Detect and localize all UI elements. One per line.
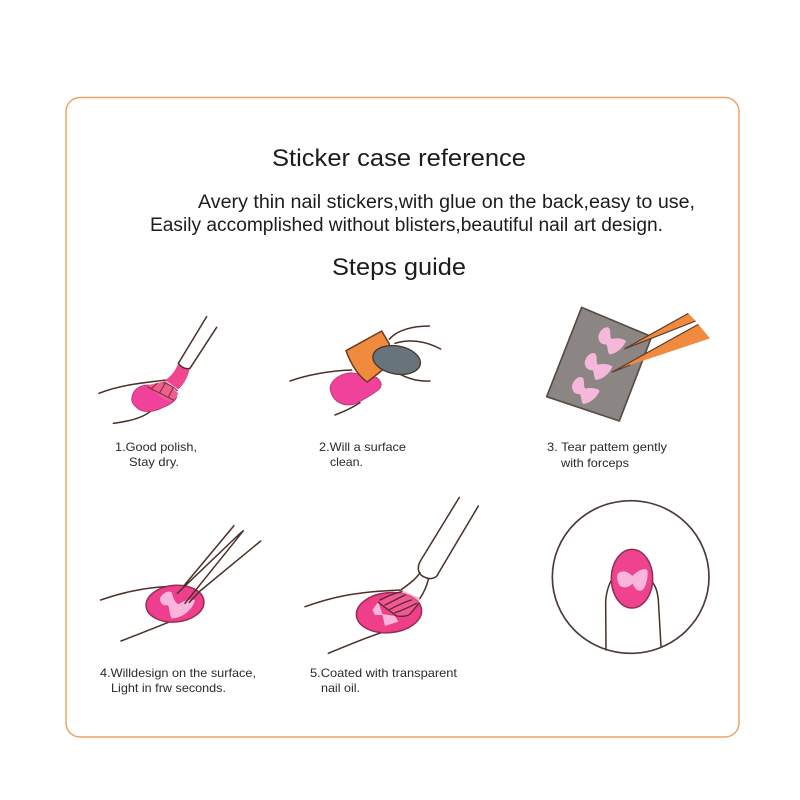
finger outline (606, 580, 661, 650)
result illustration: finished nail in circle (552, 501, 709, 653)
step 4 caption: 4.Willdesign on the surface, (100, 666, 256, 680)
grey swab (371, 342, 423, 378)
step 3 caption: with forceps (560, 456, 629, 470)
brush handle (178, 317, 217, 369)
intro text: Easily accomplished without blisters,beautiful nail art design. (150, 215, 663, 236)
step 5 illustration: transparent oil brush (305, 497, 478, 653)
step 2 caption: clean. (330, 455, 363, 469)
brush handle (402, 497, 478, 598)
forceps (624, 313, 696, 349)
step 4 caption: Light in frw seconds. (111, 681, 226, 695)
step 1 caption (115, 440, 197, 469)
step 1 caption: 1.Good polish, (115, 440, 197, 454)
orange pad (346, 331, 389, 382)
circle outline (552, 501, 709, 653)
bow sticker (372, 602, 398, 626)
bow sticker (617, 569, 648, 591)
title: Sticker case reference (272, 145, 526, 172)
step 4 illustration: placing bow with forceps (101, 526, 261, 641)
step 3 illustration: sticker sheet and forceps (547, 307, 710, 421)
nail (611, 549, 653, 608)
nail (145, 583, 205, 624)
panel: rounded card (66, 98, 739, 737)
intro text (150, 192, 695, 236)
bow sticker (160, 592, 195, 618)
step 5 caption: nail oil. (321, 681, 360, 695)
nail (132, 385, 177, 412)
brush bristles (148, 381, 178, 402)
step 3 caption (547, 440, 667, 470)
step 1 illustration: polish brush on nail (99, 317, 217, 423)
step 5 caption (310, 666, 458, 695)
step 5 caption: 5.Coated with transparent (310, 666, 458, 680)
step 2 illustration: cleaning pad on nail (290, 326, 441, 415)
heading: steps guide: Steps guide (332, 254, 466, 281)
brush bristles (378, 590, 420, 616)
step 3 caption: 3. Tear pattem gently (547, 440, 667, 454)
step 2 caption (319, 440, 406, 469)
finger lines behind tool (389, 326, 441, 381)
intro text: Avery thin nail stickers,with glue on the back,easy to use, (198, 192, 695, 213)
forceps (177, 526, 261, 603)
grey sticker sheet (547, 307, 652, 421)
brush ferrule (165, 363, 190, 389)
bow stickers (572, 327, 626, 404)
step 4 caption (100, 666, 256, 695)
nail (355, 590, 423, 635)
step 2 caption: 2.Will a surface (319, 440, 406, 454)
nail (330, 373, 381, 405)
step 1 caption: Stay dry. (129, 455, 179, 469)
